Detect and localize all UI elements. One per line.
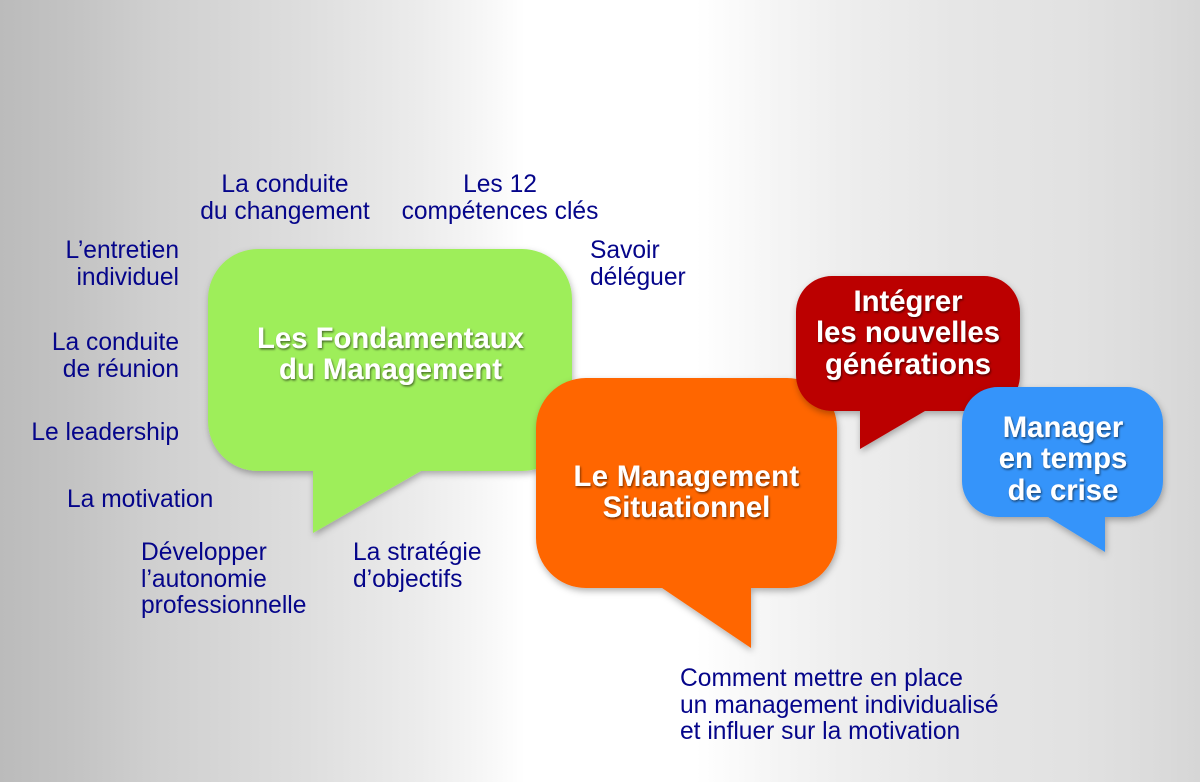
heading: Le Management Situationnel: Le Management xyxy=(574,460,799,493)
bubble: Les Fondamentaux du Management xyxy=(208,249,572,533)
heading: Les Fondamentaux du Management xyxy=(257,322,525,386)
text: Comment mettre en place un management individualisé et influer sur la motivation: et influer sur la motivation xyxy=(680,718,960,745)
heading: Intégrer les nouvelles générations: les nouvelles xyxy=(816,316,1000,349)
text: La conduite du changement: La conduite xyxy=(221,171,349,198)
text: Développer l'autonomie professionnelle xyxy=(141,539,306,619)
heading: Le Management Situationnel xyxy=(574,460,799,524)
text: L'entretien individuel: individuel xyxy=(76,264,179,291)
text: Comment mettre en place un management individualisé et influer sur la motivation xyxy=(680,665,999,745)
heading: Manager en temps de crise: en temps xyxy=(999,442,1127,475)
text: La conduite de réunion: La conduite xyxy=(52,329,179,356)
text: Les 12 compétences clés: Les 12 xyxy=(463,171,537,198)
text: La conduite de réunion: de réunion xyxy=(63,356,179,383)
text: Comment mettre en place un management individualisé et influer sur la motivation: Comment mettre en place xyxy=(680,665,963,692)
text: Savoir déléguer: déléguer xyxy=(590,264,686,291)
bubble: Le Management Situationnel xyxy=(536,378,837,648)
text: La conduite de réunion xyxy=(52,329,179,383)
text: La conduite du changement xyxy=(200,171,370,225)
heading: Intégrer les nouvelles générations: Intégrer xyxy=(853,285,963,318)
heading: Intégrer les nouvelles générations: générations xyxy=(825,348,991,381)
heading: Manager en temps de crise xyxy=(999,411,1127,507)
text: La stratégie d'objectifs xyxy=(353,539,482,593)
heading: Le Management Situationnel: Situationnel xyxy=(603,491,770,524)
text: Savoir déléguer xyxy=(590,237,686,291)
text: La motivation: La motivation xyxy=(67,486,213,513)
bubble: Manager en temps de crise xyxy=(962,387,1163,552)
text: La stratégie d'objectifs: d’objectifs xyxy=(353,566,462,593)
text: Développer l'autonomie professionnelle: Développer xyxy=(141,539,267,566)
text: Comment mettre en place un management individualisé et influer sur la motivation: un management individualisé xyxy=(680,692,999,719)
text: L'entretien individuel: L’entretien xyxy=(66,237,179,264)
text: La conduite du changement: du changement xyxy=(200,198,370,225)
bubble: Intégrer les nouvelles générations xyxy=(796,276,1020,449)
heading: Les Fondamentaux du Management: Les Fondamentaux xyxy=(257,322,525,355)
heading: Manager en temps de crise: Manager xyxy=(1003,411,1123,444)
text: Savoir déléguer: Savoir xyxy=(590,237,660,264)
text: Développer l'autonomie professionnelle: l’autonomie xyxy=(141,566,267,593)
heading: Intégrer les nouvelles générations xyxy=(816,285,1000,381)
text: La stratégie d'objectifs: La stratégie xyxy=(353,539,482,566)
text: Développer l'autonomie professionnelle: professionnelle xyxy=(141,592,306,619)
text: Les 12 compétences clés xyxy=(402,171,598,225)
heading: Les Fondamentaux du Management: du Management xyxy=(279,353,502,386)
heading: Manager en temps de crise: de crise xyxy=(1008,474,1118,507)
text: L'entretien individuel xyxy=(66,237,179,291)
text: Le leadership: Le leadership xyxy=(31,419,179,446)
text: Les 12 compétences clés: compétences clés xyxy=(402,198,598,225)
